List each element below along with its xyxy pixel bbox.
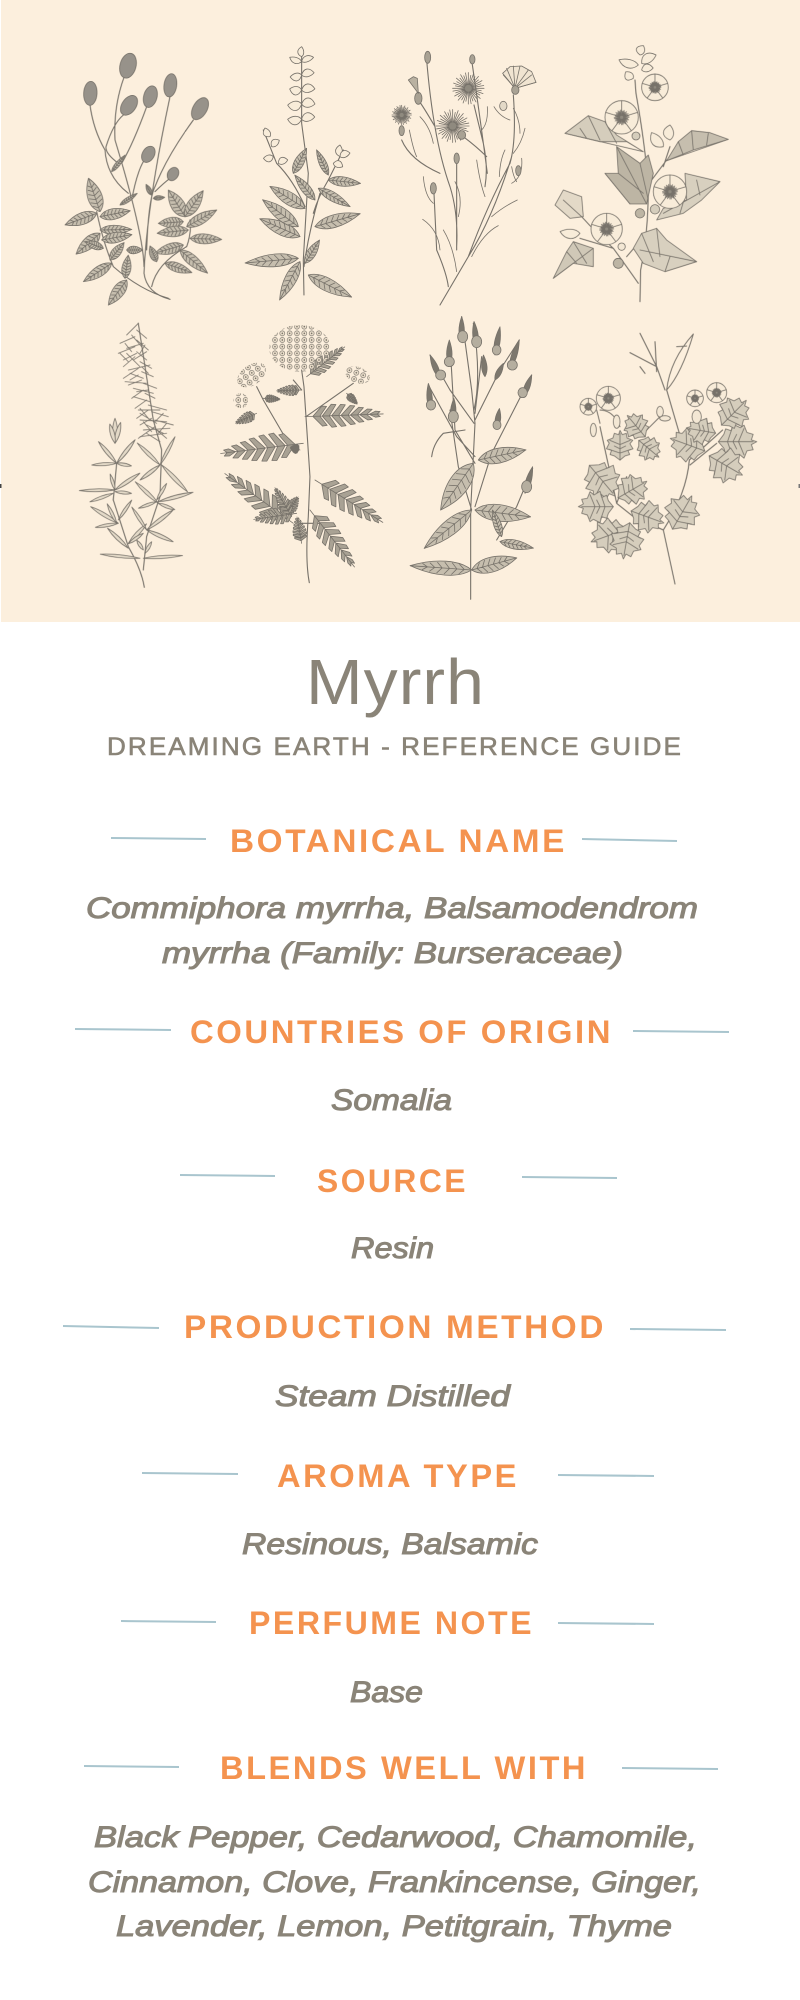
section: botanical name — [86, 823, 698, 970]
section: botanical name: Commiphora myrrha, Balsamodendrom — [86, 892, 698, 925]
section: aroma type — [142, 1458, 654, 1561]
section: production method: PRODUCTION METHOD — [184, 1309, 606, 1345]
panel: botanical illustrations background — [0, 0, 800, 622]
section: source: SOURCE — [317, 1163, 468, 1199]
section: blends well with: Lavender, Lemon, Petitgrain, Thyme — [116, 1910, 672, 1943]
section: production method — [63, 1309, 726, 1413]
section: blends well with: Black Pepper, Cedarwood, Chamomile, — [94, 1821, 697, 1854]
section: botanical name: myrrha (Family: Burseraceae) — [162, 937, 623, 970]
section: source: Resin — [351, 1232, 434, 1265]
section: perfume note — [121, 1605, 654, 1709]
illustration: cornflower plant — [392, 51, 536, 305]
illustration: mallow plant — [553, 44, 728, 302]
section: blends well with: BLENDS WELL WITH — [220, 1750, 588, 1786]
illustration: hyssop plant — [79, 323, 194, 587]
illustration: burnet plant — [63, 51, 222, 308]
section: aroma type: Resinous, Balsamic — [242, 1528, 538, 1561]
section: perfume note: Base — [350, 1676, 423, 1709]
illustration: celandine plant — [576, 333, 757, 584]
section: aroma type: AROMA TYPE — [277, 1458, 519, 1494]
section: blends well with — [84, 1750, 718, 1943]
illustration: tansy plant — [218, 325, 389, 583]
section: botanical name: BOTANICAL NAME — [230, 823, 567, 859]
section: source — [180, 1163, 617, 1265]
section: blends well with: Cinnamon, Clove, Frankincense, Ginger, — [88, 1866, 701, 1899]
section: production method: Steam Distilled — [275, 1380, 512, 1413]
illustration: vervain plant — [410, 317, 535, 599]
subtitle: DREAMING EARTH - REFERENCE GUIDE — [107, 733, 683, 761]
title: Myrrh — [306, 646, 485, 718]
section: countries of origin: COUNTRIES OF ORIGIN — [190, 1014, 613, 1050]
illustration: sage plant — [245, 47, 362, 303]
section: countries of origin: Somalia — [331, 1084, 452, 1117]
section: countries of origin — [75, 1014, 729, 1117]
section: perfume note: PERFUME NOTE — [249, 1605, 534, 1641]
